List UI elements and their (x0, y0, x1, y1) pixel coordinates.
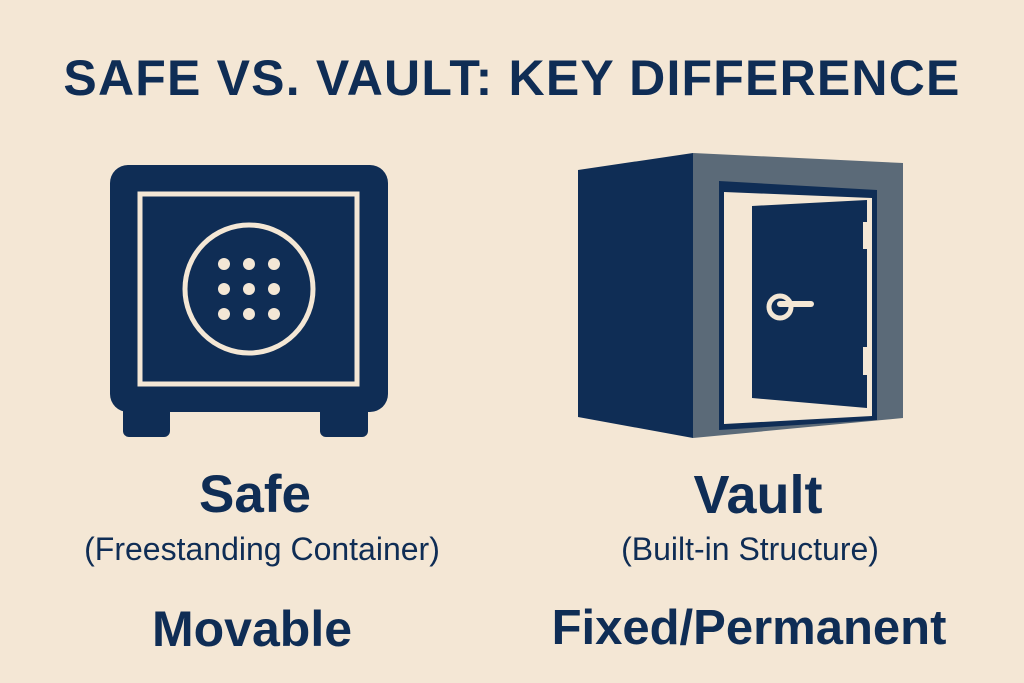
heading: safe: Safe (199, 465, 311, 524)
heading: vault: Vault (693, 465, 823, 525)
text: safe subtitle: (Freestanding Container) (84, 531, 440, 567)
title: SAFE VS. VAULT: KEY DIFFERENCE (63, 50, 961, 106)
text: vault subtitle: (Built-in Structure) (621, 531, 879, 567)
text: movable: Movable (152, 601, 352, 657)
text: fixed/permanent: Fixed/Permanent (552, 601, 946, 655)
